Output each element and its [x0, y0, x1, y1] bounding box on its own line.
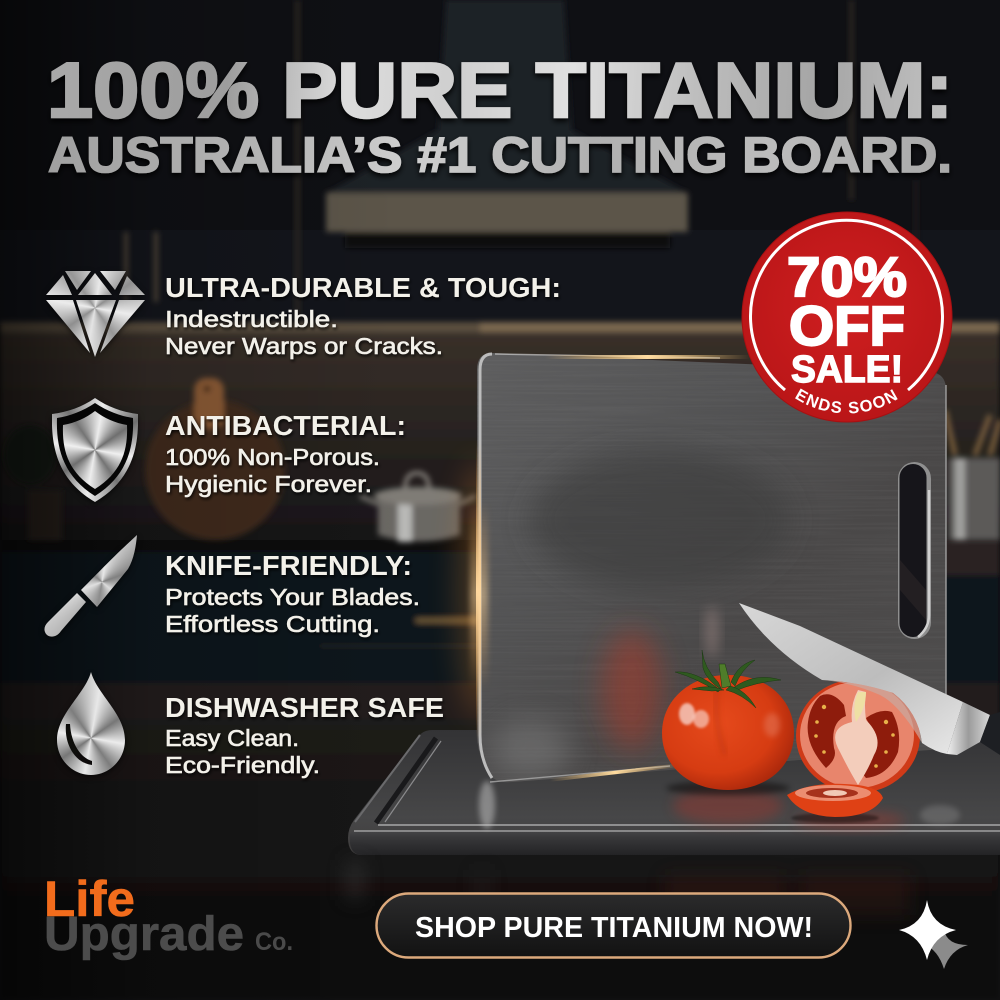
sparkle icon [899, 900, 968, 969]
feature text: ultra-durable: Never Warps or Cracks. [165, 333, 443, 359]
feature text: dishwasher safe: DISHWASHER SAFE [165, 692, 444, 723]
counter reflections [345, 860, 910, 915]
feature text: dishwasher safe: Eco-Friendly. [165, 752, 320, 778]
sale badge [742, 212, 952, 422]
badge ring [751, 220, 943, 390]
icon: diamond [46, 271, 145, 357]
icon: water drop [57, 672, 125, 776]
logo: Life [44, 871, 135, 927]
tomato slice [787, 784, 883, 823]
chef knife [739, 603, 1000, 755]
feature text: antibacterial: ANTIBACTERIAL: [165, 410, 406, 441]
feature text: knife-friendly: Protects Your Blades. [165, 584, 420, 610]
feature text: knife-friendly: KNIFE-FRIENDLY: [165, 550, 412, 581]
sale badge: SALE! [791, 349, 903, 391]
feature text: knife-friendly [165, 550, 420, 637]
logo: Upgrade [44, 908, 244, 961]
tomato halved [796, 679, 920, 793]
feature text: antibacterial: 100% Non-Porous. [165, 444, 380, 470]
upright titanium board [470, 353, 947, 783]
feature text: ultra-durable: ULTRA-DURABLE & TOUGH: [165, 272, 561, 303]
shop button: SHOP PURE TITANIUM NOW! [415, 912, 813, 944]
shop button [376, 894, 850, 958]
title: AUSTRALIA’S #1 CUTTING BOARD. [48, 127, 952, 183]
feature text: ultra-durable: Indestructible. [165, 306, 338, 332]
title: 100% PURE TITANIUM: [47, 46, 953, 134]
feature text: antibacterial: Hygienic Forever. [165, 471, 372, 497]
feature text: dishwasher safe [165, 692, 444, 778]
tomato stem [675, 650, 781, 708]
feature text: knife-friendly: Effortless Cutting. [165, 611, 380, 637]
logo: Co. [255, 928, 293, 956]
title [47, 46, 953, 183]
icon: knife [44, 535, 137, 637]
sale badge: OFF [789, 294, 905, 357]
sale badge: 70% [787, 245, 907, 308]
icon: shield [52, 398, 139, 502]
logo [44, 871, 293, 961]
feature text: dishwasher safe: Easy Clean. [165, 725, 299, 751]
feature text: antibacterial [165, 410, 406, 497]
handle slot [898, 462, 931, 639]
sale badge: ENDS SOON [795, 388, 898, 414]
tomato whole [662, 650, 794, 795]
feature text: ultra-durable [165, 272, 561, 359]
base cutting board [345, 730, 1000, 915]
